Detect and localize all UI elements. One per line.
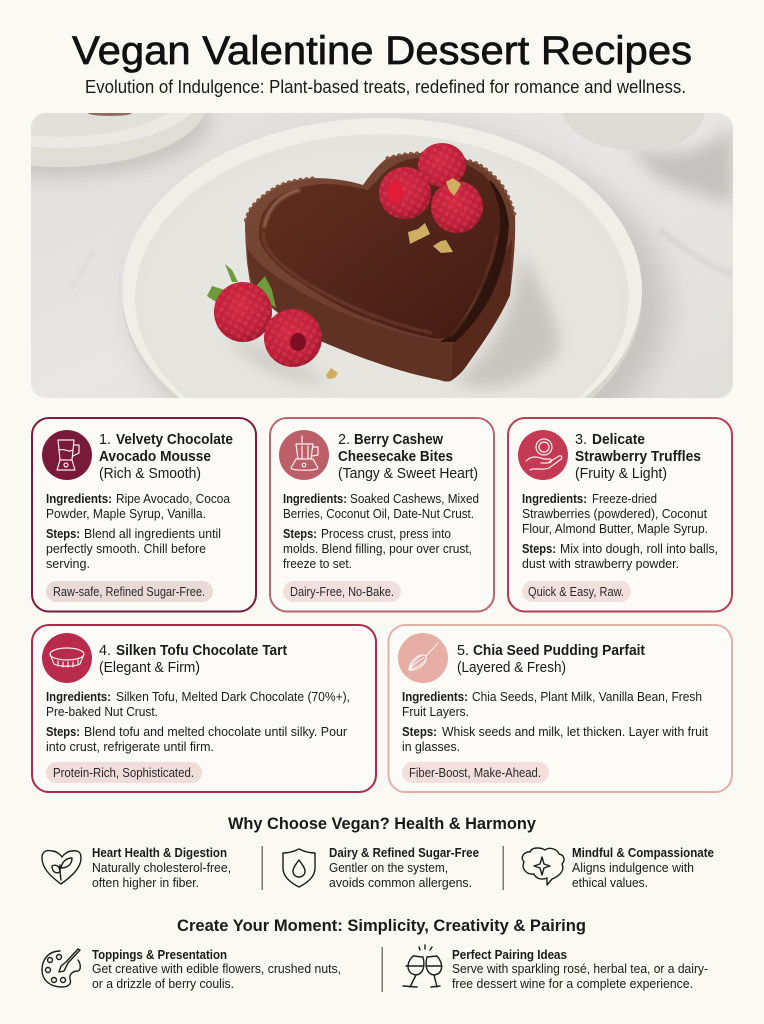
heading: (Tangy & Sweet Heart): [338, 466, 478, 482]
steps: perfectly smooth. Chill before: [46, 541, 206, 556]
ingredients: Ingredients:: [402, 689, 468, 704]
steps: [402, 724, 708, 754]
steps: Steps:: [402, 724, 437, 739]
icon: hand holding truffle: [518, 430, 568, 480]
steps: [283, 526, 472, 571]
heading: 1.: [99, 432, 111, 448]
ingredients: Ripe Avocado, Cocoa: [116, 491, 231, 506]
heading: (Fruity & Light): [575, 466, 667, 482]
ingredients: Soaked Cashews, Mixed: [350, 491, 479, 506]
tip text: [92, 947, 341, 991]
icon: clinking wine glasses: [403, 945, 442, 987]
steps: Steps:: [46, 526, 80, 541]
ingredients: Strawberries (powdered), Coconut: [522, 506, 707, 521]
tag pill: Quick & Easy, Raw.: [528, 585, 624, 599]
ingredients: [402, 689, 702, 719]
gold flakes: [326, 178, 461, 379]
benefit text: Dairy & Refined Sugar-Free: [329, 845, 479, 860]
benefit: heart health: [42, 845, 231, 890]
tart chocolate top: [259, 158, 500, 339]
tart front wall: [248, 250, 454, 382]
benefit text: Gentler on the system,: [329, 860, 448, 875]
tag pill: Dairy-Free, No-Bake.: [290, 585, 394, 599]
subtitle: Evolution of Indulgence: Plant-based treats, redefined for romance and wellness.: [85, 77, 686, 97]
hero photo: heart-shaped chocolate tart on plate: [31, 113, 733, 398]
heading: 2.: [338, 432, 350, 448]
steps: in glasses.: [402, 739, 460, 754]
heading: Silken Tofu Chocolate Tart: [116, 643, 287, 659]
icon: blender: [42, 430, 92, 480]
steps: [46, 526, 221, 571]
ingredients: Freeze-dried: [592, 491, 657, 506]
heading: [99, 432, 233, 482]
steps: Blend all ingredients until: [84, 526, 221, 541]
ingredients: Berries, Coconut Oil, Date-Nut Crust.: [283, 506, 474, 521]
tip text: Toppings & Presentation: [92, 947, 227, 962]
heading: why choose vegan: Why Choose Vegan? Health & Harmony: [228, 814, 537, 833]
tip text: free dessert wine for a complete experience.: [452, 976, 693, 991]
icon: tart pan: [42, 633, 92, 683]
tag pill: Protein-Rich, Sophisticated.: [53, 766, 194, 780]
tag pill: [46, 581, 213, 602]
ingredients: [283, 491, 479, 521]
ingredients: [46, 689, 350, 719]
icon: brain with sparkle: [522, 848, 564, 885]
steps: Whisk seeds and milk, let thicken. Layer with fruit: [442, 724, 708, 739]
ingredients: Pre-baked Nut Crust.: [46, 704, 158, 719]
ingredients: Fruit Layers.: [402, 704, 469, 719]
heading: Berry Cashew: [354, 432, 444, 448]
tip text: or a drizzle of berry coulis.: [92, 976, 234, 991]
benefit text: Mindful & Compassionate: [572, 845, 714, 860]
heading: Avocado Mousse: [99, 449, 211, 465]
benefit: mindful: [522, 845, 714, 890]
raspberries on tart: [379, 143, 483, 233]
benefit text: Aligns indulgence with: [572, 860, 694, 875]
ingredients: Ingredients:: [522, 491, 587, 506]
tag pill: Raw-safe, Refined Sugar-Free.: [53, 585, 205, 599]
tag pill: Fiber-Boost, Make-Ahead.: [409, 766, 541, 780]
heading: (Rich & Smooth): [99, 466, 201, 482]
benefit text: [572, 845, 714, 890]
tag pill: [402, 762, 549, 783]
icon: palette and brush: [42, 949, 80, 987]
tip text: [452, 947, 708, 991]
heading: (Layered & Fresh): [457, 660, 566, 676]
heading: 3.: [575, 432, 587, 448]
ingredients: [522, 491, 708, 536]
benefit text: [92, 845, 231, 890]
heading: (Elegant & Firm): [99, 660, 200, 676]
steps: Blend tofu and melted chocolate until silky. Pour: [84, 724, 348, 739]
steps: [522, 541, 718, 571]
benefit text: Naturally cholesterol-free,: [92, 860, 231, 875]
leaves: [207, 264, 276, 308]
steps: dust with strawberry powder.: [522, 556, 679, 571]
panel: recipe 1: [32, 418, 256, 612]
icon: heart with sprout: [42, 851, 81, 884]
ingredients: Silken Tofu, Melted Dark Chocolate (70%+),: [116, 689, 350, 704]
icon: whisk: [398, 633, 448, 683]
title: Vegan Valentine Dessert Recipes: [72, 29, 692, 73]
benefit text: often higher in fiber.: [92, 875, 199, 890]
benefit text: Heart Health & Digestion: [92, 845, 227, 860]
tip text: Get creative with edible flowers, crushed nuts,: [92, 961, 341, 976]
ingredients: Ingredients:: [46, 491, 112, 506]
steps: serving.: [46, 556, 90, 571]
steps: Steps:: [46, 724, 80, 739]
tag pill: [522, 581, 631, 602]
icon: shield with drop: [283, 849, 315, 887]
raspberries on plate: [214, 282, 322, 367]
steps: Steps:: [283, 526, 317, 541]
heading: [99, 643, 287, 676]
heading: Chia Seed Pudding Parfait: [473, 643, 645, 659]
ingredients: Chia Seeds, Plant Milk, Vanilla Bean, Fresh: [472, 689, 702, 704]
ingredients: [46, 491, 231, 521]
panel: recipe 4: [32, 625, 376, 792]
panel: recipe 5: [388, 625, 732, 792]
benefit: dairy and sugar free: [283, 845, 479, 890]
panel: recipe 3: [508, 418, 732, 612]
tag pill: [283, 581, 401, 602]
tip text: Serve with sparkling rosé, herbal tea, or a dairy-: [452, 961, 708, 976]
tart crust: [245, 153, 515, 382]
tip: perfect pairing: [403, 945, 708, 991]
benefit text: [329, 845, 479, 890]
heading: [457, 643, 645, 676]
tag pill: [46, 762, 202, 783]
ingredients: Ingredients:: [283, 491, 347, 506]
tart inner shadow: [440, 180, 509, 342]
steps: into crust, refrigerate until firm.: [46, 739, 214, 754]
steps: Process crust, press into: [321, 526, 451, 541]
heading: 4.: [99, 643, 111, 659]
heading: [338, 432, 478, 482]
steps: freeze to set.: [283, 556, 352, 571]
steps: molds. Blend filling, pour over crust,: [283, 541, 472, 556]
heading: Velvety Chocolate: [116, 432, 233, 448]
tip text: Perfect Pairing Ideas: [452, 947, 567, 962]
heading: create your moment: Create Your Moment: Simplicity, Creativity & Pairing: [177, 916, 586, 935]
tip: toppings and presentation: [42, 947, 341, 991]
benefit text: avoids common allergens.: [329, 875, 472, 890]
steps: Mix into dough, roll into balls,: [560, 541, 718, 556]
heading: Cheesecake Bites: [338, 449, 453, 465]
heading: Delicate: [592, 432, 645, 448]
ingredients: Flour, Almond Butter, Maple Syrup.: [522, 521, 708, 536]
heading: [575, 432, 701, 482]
ingredients: Ingredients:: [46, 689, 111, 704]
panel: recipe 2: [270, 418, 494, 612]
ingredients: Powder, Maple Syrup, Vanilla.: [46, 506, 206, 521]
steps: Steps:: [522, 541, 556, 556]
icon: food processor: [279, 430, 329, 480]
steps: [46, 724, 348, 754]
heading: Strawberry Truffles: [575, 449, 701, 465]
benefit text: ethical values.: [572, 875, 648, 890]
heading: 5.: [457, 643, 469, 659]
